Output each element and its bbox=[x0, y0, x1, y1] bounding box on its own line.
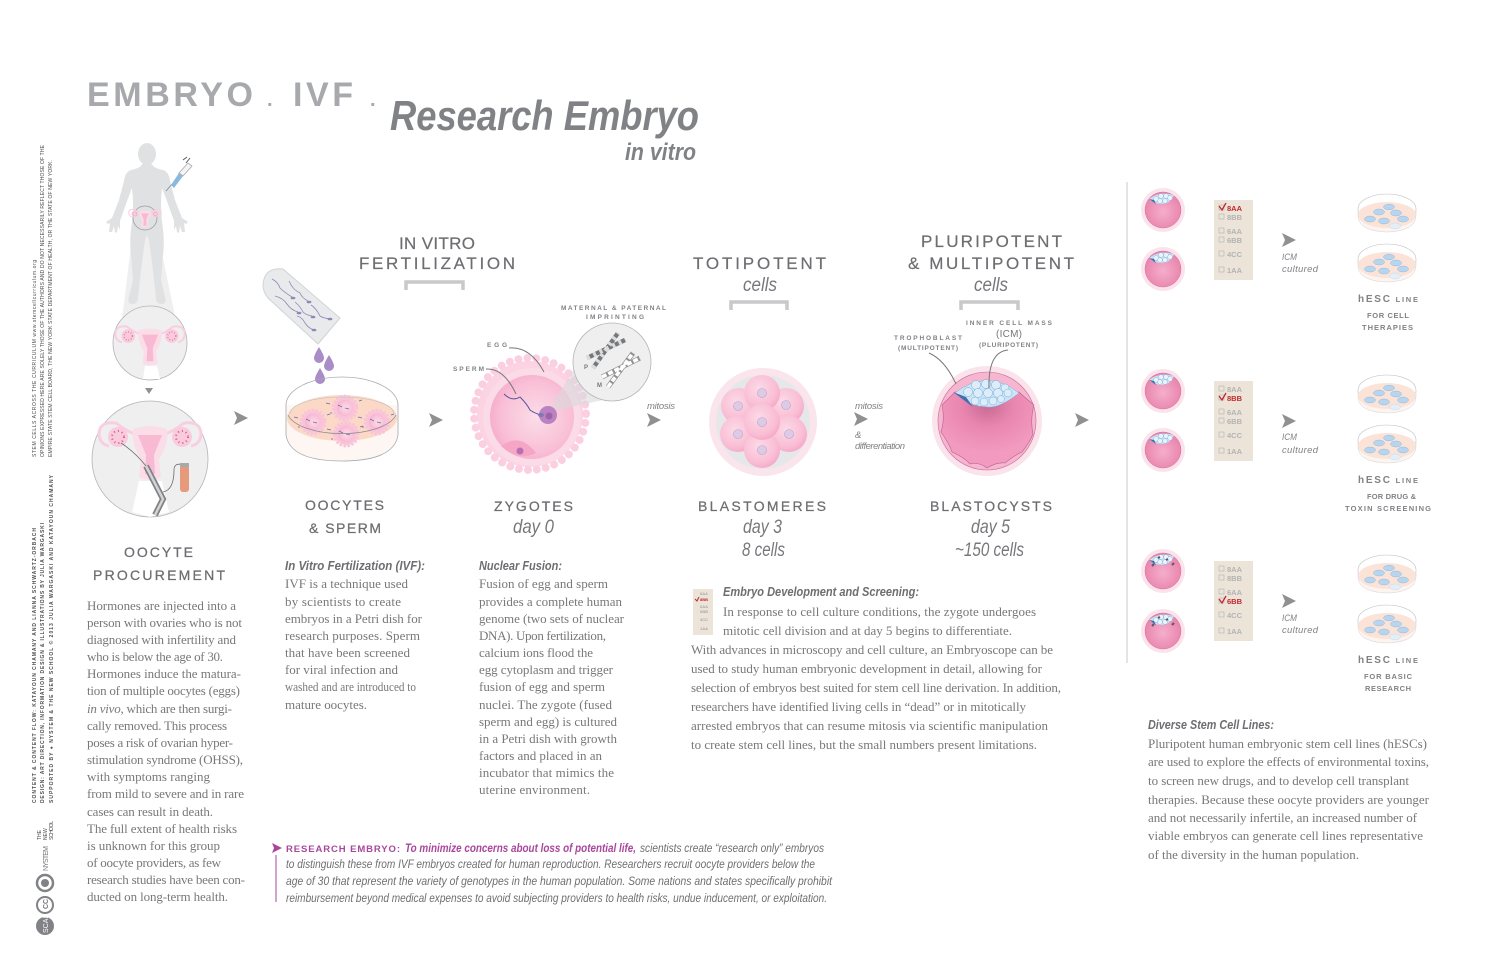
grading card: 8AA bbox=[1227, 565, 1243, 574]
label: hESC LINE bbox=[1358, 294, 1418, 305]
text: oocyte procurement: cases can result in death. bbox=[87, 804, 213, 819]
text: oocyte procurement: poses a risk of ovarian hyper- bbox=[87, 735, 233, 750]
grading card bbox=[1214, 200, 1253, 280]
text: nuclear fusion: egg cytoplasm and trigger bbox=[479, 662, 614, 677]
grading card: 4CC bbox=[1227, 611, 1243, 620]
label: inner cell mass: (ICM) bbox=[996, 329, 1022, 340]
cone to ovary zoom bbox=[120, 230, 179, 335]
text: in vitro fertilization: by scientists to create bbox=[285, 594, 401, 609]
ICM cultured arrow: ICM bbox=[1282, 252, 1297, 263]
stage label: oocyte procurement: PROCUREMENT bbox=[93, 567, 225, 583]
label: maternal and paternal imprinting: MATERNAL & PATERNAL bbox=[561, 305, 666, 312]
stage label: blastocysts bbox=[930, 498, 1052, 561]
label: egg: EGG bbox=[487, 342, 507, 349]
logos: NYSTEM bbox=[43, 846, 50, 871]
text: diverse stem cell lines: viable embryos can generate cell lines representative bbox=[1148, 828, 1423, 843]
text: embryo development and screening: used to study human embryonic development in detail, allowing for bbox=[691, 661, 1043, 676]
text: oocyte procurement: cally removed. This process bbox=[87, 718, 227, 733]
text: oocyte procurement: person with ovaries who is not bbox=[87, 615, 242, 630]
embryos bbox=[1141, 549, 1185, 653]
panel: hESC line for basic research bbox=[1141, 549, 1418, 693]
credits: curriculum disclaimer: OPINIONS EXPRESSED HERE ARE SOLELY THOSE OF THE AUTHORS AND DO NOT NECESSARILY REFLECT THOSE OF THE bbox=[40, 144, 46, 457]
title: Research Embryo bbox=[390, 92, 699, 139]
credits: authors: SUPPORTED BY ● NYSTEM & THE NEW SCHOOL © 2013 JULIA WARGASKI AND KATAYOUN CHAMANY bbox=[48, 474, 55, 803]
header: totipotent: cells bbox=[743, 275, 777, 296]
text: embryo development and screening: Embryo Development and Screening: bbox=[723, 585, 919, 599]
text: nuclear fusion: incubator that mimics the bbox=[479, 765, 614, 780]
header: pluripotent and multipotent: PLURIPOTENT bbox=[921, 232, 1062, 251]
text: oocyte procurement: of oocyte providers, as few bbox=[87, 855, 222, 870]
text: in vitro fertilization: that have been screened bbox=[285, 645, 410, 660]
grading card: 4CC bbox=[1227, 250, 1243, 259]
text: oocyte procurement: The full extent of health risks bbox=[87, 821, 237, 836]
credits: curriculum disclaimer bbox=[32, 144, 54, 457]
grading card: 6BB bbox=[1227, 417, 1243, 426]
ICM cultured arrow bbox=[1282, 594, 1319, 636]
text: nuclear fusion: uterine environment. bbox=[479, 782, 590, 797]
illustration: sperm tube bbox=[263, 269, 340, 344]
stage label: blastomeres: BLASTOMERES bbox=[698, 498, 826, 514]
header: in vitro fertilization: FERTILIZATION bbox=[359, 254, 515, 273]
egg and sperm leader lines bbox=[486, 348, 544, 394]
divider bbox=[1126, 182, 1128, 663]
stage label: blastomeres: 8 cells bbox=[742, 540, 785, 561]
callout: chromosomes lens: P bbox=[584, 365, 588, 371]
callout: research embryo: scientists create “research only” embryos bbox=[640, 843, 824, 855]
stage label: blastocysts: BLASTOCYSTS bbox=[930, 498, 1052, 514]
title: . bbox=[370, 89, 376, 111]
grading card: 6AA bbox=[1227, 588, 1243, 597]
text: embryo development and screening: In response to cell culture conditions, the zygote undergoes bbox=[723, 604, 1036, 619]
body figure with injection bbox=[106, 143, 192, 304]
credits: authors: CONTENT & CONTENT FLOW: KATAYOUN CHAMANY AND LIANNA SCHWARTZ-ORBACH bbox=[32, 528, 38, 803]
mitosis and differentiation arrow bbox=[854, 401, 905, 452]
label: TOXIN SCREENING bbox=[1345, 504, 1431, 513]
grading card: 8BB bbox=[1227, 574, 1243, 583]
text: nuclear fusion: calcium ions flood the bbox=[479, 645, 593, 660]
text: diverse stem cell lines: therapies. Because these oocyte providers are younger bbox=[1148, 792, 1430, 807]
text: in vitro fertilization: for viral infection and bbox=[285, 662, 398, 677]
stage label: zygotes: ZYGOTES bbox=[494, 498, 573, 514]
small down arrow bbox=[145, 388, 153, 394]
text: diverse stem cell lines bbox=[1148, 718, 1430, 862]
label bbox=[1358, 655, 1418, 693]
label: trophoblast: TROPHOBLAST bbox=[894, 335, 962, 342]
embryos bbox=[1141, 188, 1185, 291]
label: inner cell mass bbox=[966, 320, 1053, 349]
mitosis and differentiation arrow: differentiation bbox=[855, 441, 905, 452]
title bbox=[87, 76, 699, 166]
text: diverse stem cell lines: to screen new drugs, and to develop cell transplant bbox=[1148, 773, 1409, 788]
panel: hESC line for drug and toxin screening bbox=[1141, 369, 1431, 513]
callout: research embryo: age of 30 that represent the variety of genotypes in the human population. Some nations and states specifically prohibit bbox=[286, 876, 833, 888]
grading card: 8BB bbox=[1227, 394, 1243, 403]
dishes bbox=[1358, 194, 1416, 282]
grading card: 8AA bbox=[1227, 385, 1243, 394]
leader lines bbox=[929, 350, 1008, 388]
grading card: 6BB bbox=[1227, 236, 1243, 245]
text: embryo development and screening bbox=[691, 585, 1061, 752]
arrow bbox=[234, 411, 248, 425]
label: hESC LINE bbox=[1358, 655, 1418, 666]
text: oocyte procurement: Hormones are injected into a bbox=[87, 598, 236, 613]
text: embryo development and screening: selection of embryos best suited for stem cell line derivation. In addition, bbox=[691, 680, 1061, 695]
grading card: 6AA bbox=[1227, 408, 1243, 417]
icon: mini embryo grading card: 8BB bbox=[700, 597, 708, 602]
text: diverse stem cell lines: and not necessarily infertile, an increased number of bbox=[1148, 810, 1418, 825]
grading card: 1AA bbox=[1227, 266, 1243, 275]
callout: research embryo: RESEARCH EMBRYO: bbox=[286, 844, 400, 855]
ICM cultured arrow: cultured bbox=[1282, 625, 1319, 636]
text: nuclear fusion: Fusion of egg and sperm bbox=[479, 576, 608, 591]
grading card: 1AA bbox=[1227, 447, 1243, 456]
text: oocyte procurement: diagnosed with infertility and bbox=[87, 632, 236, 647]
credits: authors: DESIGN: ART DIRECTION, INFORMATION DESIGN & ILLUSTRATIONS BY JULIA WARGASKI bbox=[40, 522, 46, 803]
dishes bbox=[1358, 555, 1416, 643]
arrow bbox=[429, 413, 443, 427]
title: in vitro bbox=[625, 139, 696, 166]
callout: chromosomes lens bbox=[548, 323, 651, 412]
grading card: 6AA bbox=[1227, 227, 1243, 236]
icon: mini embryo grading card: 6BB bbox=[700, 609, 708, 614]
label: THERAPIES bbox=[1362, 323, 1413, 332]
ICM cultured arrow bbox=[1282, 414, 1319, 456]
text: embryo development and screening: With advances in microscopy and cell culture, an Embryoscope can be bbox=[691, 642, 1053, 657]
ICM cultured arrow: cultured bbox=[1282, 264, 1319, 275]
text: oocyte procurement: Hormones induce the matura- bbox=[87, 666, 241, 681]
text: oocyte procurement bbox=[87, 598, 245, 904]
illustration: blastocyst bbox=[894, 320, 1053, 476]
logos: SCAI bbox=[43, 917, 50, 933]
label: inner cell mass: (PLURIPOTENT) bbox=[979, 342, 1038, 349]
stage label: oocytes and sperm bbox=[305, 497, 384, 536]
illustration: drops bbox=[314, 347, 334, 384]
arrow bbox=[1075, 413, 1089, 427]
text: nuclear fusion: Nuclear Fusion: bbox=[479, 559, 562, 573]
header: totipotent: TOTIPOTENT bbox=[693, 254, 826, 273]
text: oocyte procurement: ducted on long-term health. bbox=[87, 889, 228, 904]
stage label: oocyte procurement bbox=[93, 544, 225, 583]
text: nuclear fusion: sperm and egg) is cultured bbox=[479, 714, 618, 729]
logos bbox=[36, 821, 55, 935]
text: in vitro fertilization: In Vitro Fertilization (IVF): bbox=[285, 559, 425, 573]
ICM cultured arrow: cultured bbox=[1282, 445, 1319, 456]
label: inner cell mass: INNER CELL MASS bbox=[966, 320, 1053, 327]
text: embryo development and screening: arrested embryos that can resume mitosis via scientific manipulation bbox=[691, 718, 1048, 733]
text: diverse stem cell lines: are used to explore the effects of environmental toxins, bbox=[1148, 754, 1429, 769]
mitosis arrow bbox=[647, 401, 675, 427]
header: in vitro fertilization bbox=[359, 234, 515, 290]
illustration: zygote bbox=[453, 305, 666, 470]
header: pluripotent and multipotent: & MULTIPOTENT bbox=[908, 254, 1074, 273]
grading card: 8BB bbox=[1227, 213, 1243, 222]
stage label: zygotes: day 0 bbox=[513, 517, 554, 538]
text: oocyte procurement: stimulation syndrome (OHSS), bbox=[87, 752, 243, 767]
icon: mini embryo grading card: 1AA bbox=[700, 626, 708, 631]
sperm in egg bbox=[504, 394, 541, 415]
text: in vitro fertilization: washed and are introduced to bbox=[285, 679, 416, 694]
text: diverse stem cell lines: of the diversity in the human population. bbox=[1148, 847, 1359, 862]
text: embryo development and screening: researchers have identified living cells in “dead” or in mitotically bbox=[691, 699, 1026, 714]
grading card: 1AA bbox=[1227, 627, 1243, 636]
label: maternal and paternal imprinting: IMPRINTING bbox=[586, 314, 644, 321]
callout: research embryo: To minimize concerns about loss of potential life, bbox=[405, 843, 636, 855]
text: nuclear fusion: genome (two sets of nuclear bbox=[479, 611, 625, 626]
text: oocyte procurement: who is below the age of 30. bbox=[87, 649, 223, 664]
text: nuclear fusion bbox=[479, 559, 625, 797]
ICM cultured arrow bbox=[1282, 233, 1319, 275]
label: FOR BASIC bbox=[1364, 672, 1413, 681]
header: pluripotent and multipotent: cells bbox=[974, 275, 1008, 296]
text: nuclear fusion: provides a complete human bbox=[479, 594, 622, 609]
ICM cultured arrow: ICM bbox=[1282, 432, 1297, 443]
grading card bbox=[1214, 561, 1253, 641]
callout: research embryo: reimbursement beyond medical expenses to avoid subjecting providers to health risks, undue inducement, or exploitation. bbox=[286, 893, 827, 905]
credits: authors bbox=[32, 474, 55, 803]
oocyte retrieval circle bbox=[92, 401, 208, 517]
stage label: blastomeres: day 3 bbox=[743, 517, 782, 538]
text: nuclear fusion: in a Petri dish with growth bbox=[479, 731, 618, 746]
text: oocyte procurement: from mild to severe and in rare bbox=[87, 786, 244, 801]
mitosis and differentiation arrow: mitosis bbox=[855, 401, 883, 412]
title: . bbox=[267, 89, 273, 111]
label: maternal and paternal imprinting bbox=[561, 305, 666, 321]
text: in vitro fertilization bbox=[285, 559, 425, 712]
grading card: 8AA bbox=[1227, 204, 1243, 213]
label: FOR DRUG & bbox=[1367, 492, 1417, 501]
text: diverse stem cell lines: Pluripotent human embryonic stem cell lines (hESCs) bbox=[1148, 736, 1427, 751]
text: in vitro fertilization: IVF is a technique used bbox=[285, 576, 408, 591]
stage label: oocytes and sperm: OOCYTES bbox=[305, 497, 384, 513]
grading card: 4CC bbox=[1227, 431, 1243, 440]
panel: hESC line for cell therapies bbox=[1141, 188, 1418, 332]
credits: curriculum disclaimer: EMPIRE STATE STEM CELL BOARD, THE NEW YORK STATE DEPARTMENT OF HEALTH, OR THE STATE OF NEW YORK. bbox=[48, 160, 54, 457]
text: embryo development and screening: to create stem cell lines, but the small numbers present limitations. bbox=[691, 737, 1037, 752]
ICM cultured arrow: ICM bbox=[1282, 613, 1297, 624]
dishes bbox=[1358, 375, 1416, 463]
text: oocyte procurement: research studies have been con- bbox=[87, 872, 245, 887]
icon: mini embryo grading card bbox=[693, 589, 713, 635]
text: nuclear fusion: factors and placed in an bbox=[479, 748, 602, 763]
grading card bbox=[1214, 381, 1253, 461]
label: sperm: SPERM bbox=[453, 366, 484, 373]
logos: NEW bbox=[43, 828, 49, 840]
logos: CC bbox=[43, 899, 50, 909]
text: embryo development and screening: mitotic cell division and at day 5 begins to differentiate. bbox=[723, 623, 1012, 638]
logos: SCHOOL bbox=[49, 821, 55, 840]
text: oocyte procurement: in vivo, which are then surgi- bbox=[87, 701, 232, 716]
title: EMBRYO bbox=[87, 76, 253, 114]
header: in vitro fertilization: IN VITRO bbox=[399, 234, 475, 253]
text: oocyte procurement: with symptoms ranging bbox=[87, 769, 210, 784]
credits: curriculum disclaimer: STEM CELLS ACROSS THE CURRICULUM www.stemcellcurriculum.org bbox=[32, 260, 38, 457]
stage label: blastomeres bbox=[698, 498, 826, 561]
illustration: blastomeres bbox=[709, 368, 817, 476]
illustration: oocyte procurement bbox=[92, 143, 208, 517]
logos: THE bbox=[37, 829, 43, 840]
illustration: petri dish with eggs and sperm bbox=[286, 377, 398, 461]
callout: research embryo: to distinguish these from IVF embryos created for human reproduction. Researchers recruit oocyte providers below the bbox=[286, 859, 815, 871]
stage label: oocytes and sperm: & SPERM bbox=[309, 520, 381, 536]
text: oocyte procurement: is unknown for this group bbox=[87, 838, 220, 853]
callout: chromosomes lens: M bbox=[597, 383, 602, 389]
label bbox=[1358, 294, 1418, 332]
text: nuclear fusion: fusion of egg and sperm bbox=[479, 679, 605, 694]
stage label: blastocysts: ~150 cells bbox=[955, 540, 1024, 561]
label: trophoblast: (MULTIPOTENT) bbox=[898, 345, 958, 352]
text: diverse stem cell lines: Diverse Stem Cell Lines: bbox=[1148, 718, 1274, 732]
icon: mini embryo grading card: 4CC bbox=[700, 617, 708, 622]
text: in vitro fertilization: embryos in a Petri dish for bbox=[285, 611, 423, 626]
header: totipotent bbox=[693, 254, 826, 310]
text: nuclear fusion: DNA). Upon fertilization, bbox=[479, 628, 606, 643]
icon: mini embryo grading card: 6AA bbox=[700, 604, 708, 609]
stage label: zygotes bbox=[494, 498, 573, 538]
label: trophoblast bbox=[894, 335, 962, 352]
mitosis arrow: mitosis bbox=[647, 401, 675, 412]
label: hESC LINE bbox=[1358, 475, 1418, 486]
label: FOR CELL bbox=[1367, 311, 1409, 320]
label: RESEARCH bbox=[1365, 684, 1411, 693]
text: oocyte procurement: tion of multiple oocytes (eggs) bbox=[87, 683, 240, 698]
mitosis and differentiation arrow: & bbox=[855, 430, 861, 441]
header: pluripotent and multipotent bbox=[908, 232, 1074, 310]
text: nuclear fusion: nuclei. The zygote (fused bbox=[479, 697, 612, 712]
stage label: oocyte procurement: OOCYTE bbox=[124, 544, 193, 560]
label bbox=[1345, 475, 1431, 513]
stage label: blastocysts: day 5 bbox=[971, 517, 1010, 538]
text: in vitro fertilization: mature oocytes. bbox=[285, 697, 367, 712]
title: IVF bbox=[293, 76, 353, 114]
callout: research embryo bbox=[272, 843, 833, 905]
ovary zoom circle bbox=[113, 306, 187, 380]
text: in vitro fertilization: research purposes. Sperm bbox=[285, 628, 420, 643]
grading card: 6BB bbox=[1227, 597, 1243, 606]
icon: mini embryo grading card: 8AA bbox=[700, 591, 708, 596]
embryos bbox=[1141, 369, 1185, 472]
